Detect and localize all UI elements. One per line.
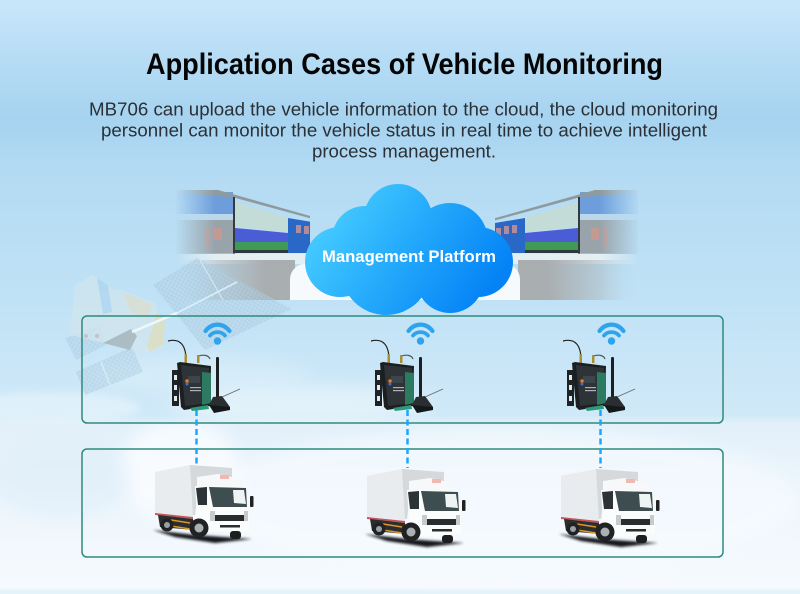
- description text: [89, 100, 718, 162]
- description text: MB706 can upload the vehicle information to the cloud, the cloud monitoring: [89, 100, 718, 120]
- truck 1: [153, 465, 254, 543]
- title: Application Cases of Vehicle Monitoring: [146, 48, 663, 81]
- description text: personnel can monitor the vehicle status in real time to achieve intelligent: [101, 120, 707, 140]
- icon: wifi 2: [408, 325, 432, 345]
- icon: wifi 3: [600, 325, 624, 345]
- panel: routers row: [82, 316, 723, 423]
- satellite (faded background image): [65, 275, 165, 395]
- dashed connector 2: [406, 410, 409, 468]
- truck 2: [365, 469, 466, 547]
- router 2: [371, 340, 443, 413]
- description text: process management.: [312, 142, 496, 162]
- dashed connector 3: [599, 410, 602, 468]
- cloud: management platform: [305, 184, 513, 315]
- control room backdrop: [175, 190, 638, 300]
- background clouds over earth: [0, 361, 762, 512]
- panel: trucks row: [82, 449, 723, 557]
- router 3: [563, 340, 635, 413]
- cloud label: Management Platform: [322, 247, 496, 266]
- dashed connector 1: [195, 410, 198, 466]
- truck 3: [559, 469, 660, 547]
- router 1: [168, 340, 240, 413]
- icon: wifi 1: [206, 325, 230, 345]
- satellite solar panel (faded, over the floor): [132, 258, 292, 350]
